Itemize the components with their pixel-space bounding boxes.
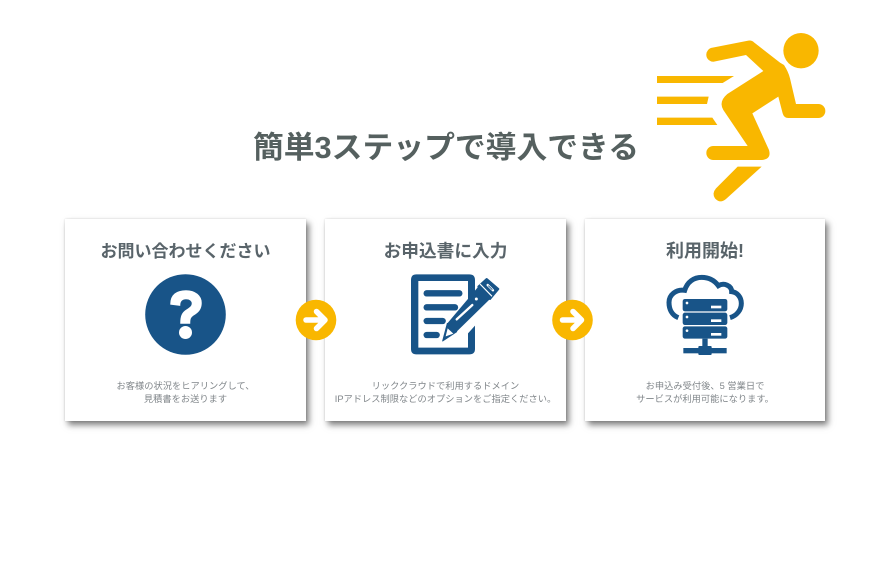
text: step 2 description: リッククラウドで利用するドメイン bbox=[372, 381, 519, 391]
text: step 1 description: 見積書をお送ります bbox=[144, 394, 227, 404]
icon: question mark bbox=[145, 274, 226, 355]
heading: step 1: お問い合わせください bbox=[100, 242, 270, 261]
arrow: step 1 to 2 bbox=[296, 300, 336, 340]
icon: cloud server bbox=[666, 274, 744, 355]
text: step 3 description: お申込み受付後、5 営業日で bbox=[646, 381, 764, 391]
text: step 3 description: サービスが利用可能になります。 bbox=[636, 394, 774, 404]
heading: step 2: お申込書に入力 bbox=[384, 241, 507, 261]
arrow: step 2 to 3 bbox=[552, 300, 593, 340]
text: step 1 description: お客様の状況をヒアリングして、 bbox=[116, 381, 254, 391]
icon: document and pencil bbox=[411, 274, 500, 354]
heading: step 3: 利用開始! bbox=[666, 241, 744, 261]
text: step 2 description bbox=[335, 381, 556, 404]
panel: step 2 bbox=[325, 219, 566, 421]
panel: step 3 bbox=[585, 219, 825, 421]
text: step 2 description: IPアドレス制限などのオプションをご指定ください。 bbox=[335, 394, 556, 404]
title: 簡単3ステップで導入できる bbox=[253, 130, 639, 165]
icon: running person bbox=[657, 33, 826, 202]
text: step 1 description bbox=[116, 381, 254, 404]
text: step 3 description bbox=[636, 381, 774, 404]
panel: step 1 bbox=[65, 219, 306, 421]
